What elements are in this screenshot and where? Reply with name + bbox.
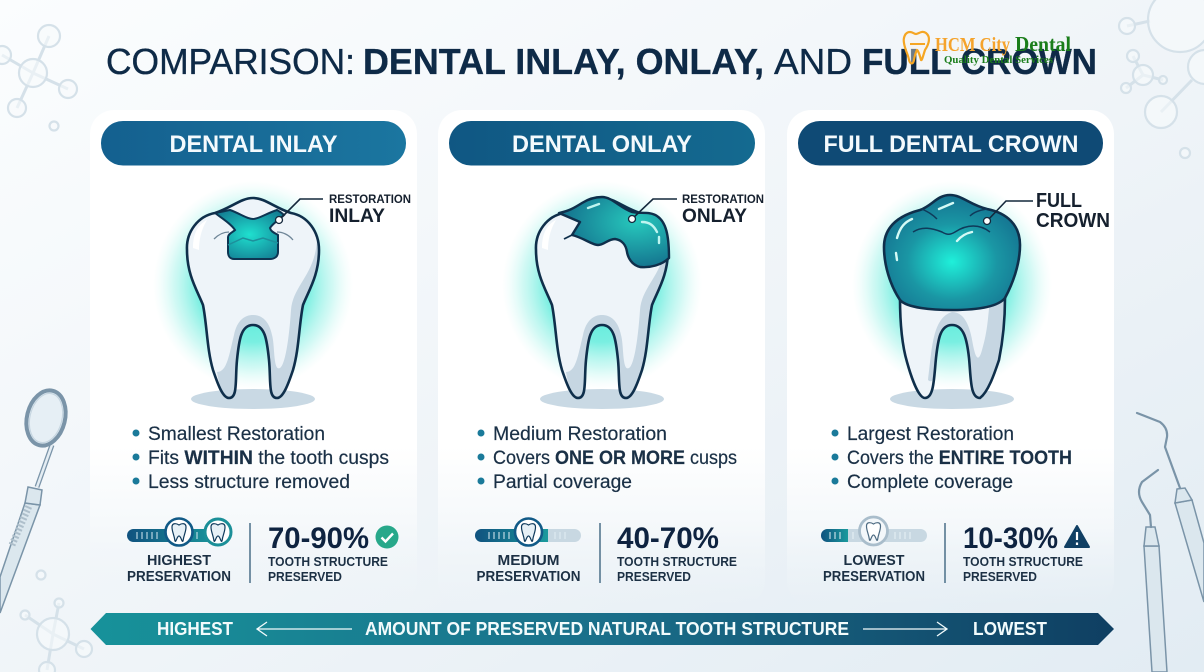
callout: restoration inlay bbox=[276, 192, 411, 227]
panel: dental onlay bbox=[438, 110, 765, 605]
bullet list: crown: Covers the ENTIRE TOOTH bbox=[847, 448, 1072, 469]
preservation meter: highest: HIGHEST bbox=[147, 553, 211, 569]
stat: 40-70%: PRESERVED bbox=[617, 569, 691, 584]
stat: 70-90%: PRESERVED bbox=[268, 569, 342, 584]
arrow band: amount of preserved natural tooth structure: HIGHEST bbox=[157, 618, 234, 639]
arrow band: amount of preserved natural tooth structure bbox=[90, 613, 1114, 645]
panel: full dental crown bbox=[787, 110, 1114, 605]
stat: 10-30% bbox=[963, 522, 1089, 584]
callout: restoration inlay: RESTORATION bbox=[329, 192, 411, 206]
logo: HCM City Dental: Quality Dental Services bbox=[944, 54, 1054, 66]
molecule decoration: top right bbox=[1119, 0, 1204, 158]
dental probes bbox=[1137, 413, 1204, 672]
stat: 40-70%: 40-70% bbox=[617, 522, 719, 555]
preservation meter: medium: PRESERVATION bbox=[476, 569, 580, 585]
preservation meter: lowest bbox=[821, 517, 927, 585]
heading: dental onlay bbox=[449, 121, 755, 166]
heading: dental inlay bbox=[101, 121, 406, 166]
stat: 10-30%: 10-30% bbox=[963, 522, 1058, 555]
divider bbox=[249, 523, 251, 583]
stat: 70-90%: TOOTH STRUCTURE bbox=[268, 554, 388, 569]
stat: 40-70%: TOOTH STRUCTURE bbox=[617, 554, 737, 569]
stat: 70-90% bbox=[268, 522, 398, 584]
preservation meter: lowest: LOWEST bbox=[844, 553, 905, 569]
callout: full crown: CROWN bbox=[1036, 210, 1110, 232]
stat: 10-30%: PRESERVED bbox=[963, 569, 1037, 584]
logo: HCM City Dental bbox=[904, 32, 1071, 66]
bullet list: inlay: Fits WITHIN the tooth cusps bbox=[148, 448, 389, 469]
callout: full crown: FULL bbox=[1036, 190, 1082, 212]
callout: restoration onlay: RESTORATION bbox=[682, 192, 764, 206]
title: FULL CROWN bbox=[862, 41, 1097, 82]
bullet list: onlay bbox=[478, 424, 737, 493]
heading: dental inlay: DENTAL INLAY bbox=[170, 131, 338, 158]
title: AND bbox=[774, 41, 852, 82]
preservation meter: highest: PRESERVATION bbox=[127, 569, 231, 585]
molecule decoration: bottom left bbox=[20, 570, 92, 672]
preservation meter: lowest: PRESERVATION bbox=[823, 569, 925, 585]
heading: full dental crown bbox=[798, 121, 1103, 166]
logo: HCM City Dental: HCM City bbox=[935, 34, 1010, 56]
bullet list: onlay: Medium Restoration bbox=[493, 424, 667, 445]
arrow band: amount of preserved natural tooth structure: AMOUNT OF PRESERVED NATURAL TOOTH STRUCTURE bbox=[365, 618, 849, 639]
preservation meter: medium: MEDIUM bbox=[498, 553, 560, 569]
divider bbox=[944, 523, 946, 583]
illustration: tooth with inlay bbox=[153, 181, 353, 409]
illustration: tooth with full crown bbox=[852, 181, 1052, 409]
title: DENTAL INLAY, ONLAY, bbox=[363, 41, 764, 82]
illustration: tooth with onlay bbox=[502, 181, 702, 409]
preservation meter: highest bbox=[127, 518, 231, 585]
heading: full dental crown: FULL DENTAL CROWN bbox=[824, 131, 1078, 158]
bullet list: inlay: Less structure removed bbox=[148, 472, 350, 493]
arrow band: amount of preserved natural tooth structure: LOWEST bbox=[973, 618, 1048, 639]
callout: restoration inlay: INLAY bbox=[329, 206, 385, 227]
title: COMPARISON: bbox=[106, 41, 355, 82]
panel: dental inlay bbox=[90, 110, 417, 605]
bullet list: inlay: Smallest Restoration bbox=[148, 424, 325, 445]
bullet list: crown bbox=[832, 424, 1072, 493]
divider bbox=[599, 523, 601, 583]
stat: 10-30%: TOOTH STRUCTURE bbox=[963, 554, 1083, 569]
bullet list: onlay: Partial coverage bbox=[493, 472, 632, 493]
molecule decoration: top left bbox=[0, 25, 77, 130]
preservation meter: medium bbox=[475, 518, 581, 585]
callout: restoration onlay: ONLAY bbox=[682, 206, 747, 227]
dental mirror bbox=[0, 386, 71, 613]
bullet list: crown: Largest Restoration bbox=[847, 424, 1014, 445]
bullet list: onlay: Covers ONE OR MORE cusps bbox=[493, 448, 737, 469]
title bbox=[106, 41, 1097, 82]
callout: restoration onlay bbox=[628, 192, 764, 227]
bullet list: crown: Complete coverage bbox=[847, 472, 1013, 493]
bullet list: inlay bbox=[132, 424, 389, 493]
callout: full crown bbox=[984, 190, 1110, 232]
logo: HCM City Dental: Dental bbox=[1015, 32, 1071, 56]
stat: 40-70% bbox=[617, 522, 737, 584]
stat: 70-90%: 70-90% bbox=[268, 522, 369, 555]
heading: dental onlay: DENTAL ONLAY bbox=[512, 131, 692, 158]
